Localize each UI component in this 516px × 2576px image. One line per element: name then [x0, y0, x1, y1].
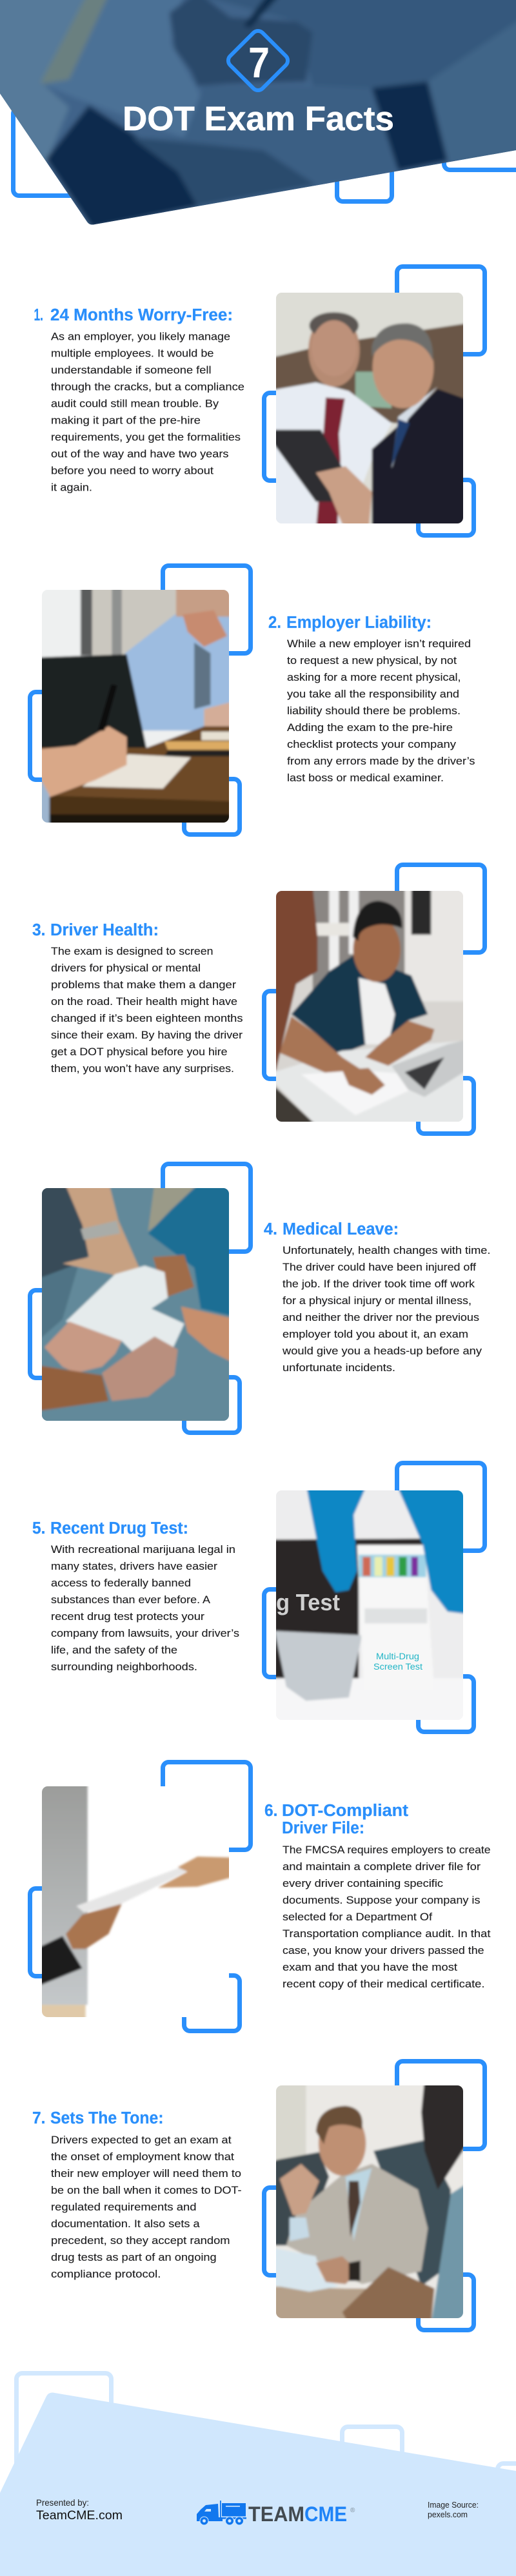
footer background shape: [0, 2393, 516, 2576]
body text: company from lawsuits, your driver’s: [51, 1627, 239, 1639]
heading: Recent Drug Test:: [50, 1519, 188, 1537]
panel: fact 6: [26, 1762, 491, 2031]
body text: The driver could have been injured off: [283, 1261, 476, 1273]
heading: DOT-Compliant: [282, 1802, 409, 1820]
body text: many states, drivers have easier: [51, 1560, 217, 1572]
brackets: [264, 2062, 485, 2330]
body text: life, and the safety of the: [51, 1644, 177, 1656]
body text: employer told you about it, an exam: [283, 1328, 468, 1340]
body text: making it part of the pre-hire: [51, 414, 201, 427]
header banner: [0, 0, 516, 224]
body text: substances than ever before. A: [51, 1594, 211, 1606]
heading: 3.: [32, 921, 45, 939]
body text: get a DOT physical before you hire: [51, 1046, 227, 1058]
heading: 5.: [32, 1519, 45, 1537]
body text: asking for a more recent physical,: [287, 671, 461, 683]
body text: unfortunate incidents.: [283, 1361, 395, 1374]
body text: [283, 1844, 491, 1990]
body text: exam and that you have the most: [283, 1961, 457, 1973]
heading: 1.: [34, 306, 43, 324]
body text: them, you won’t have any surprises.: [51, 1062, 234, 1075]
body text: for a physical injury or mental illness,: [283, 1294, 471, 1307]
presented by: TeamCME.com: [36, 2509, 123, 2522]
body text: documents. Suppose your company is: [283, 1894, 480, 1906]
body text: access to federally banned: [51, 1577, 191, 1589]
icon: truck: [197, 2501, 246, 2525]
body text: [51, 1543, 239, 1673]
body text: and maintain a complete driver file for: [283, 1860, 481, 1873]
heading: Driver File:: [282, 1819, 364, 1837]
body text: recent drug test protects your: [51, 1610, 204, 1623]
body text: documentation. It also sets a: [51, 2218, 200, 2230]
heading: 2.: [268, 614, 281, 632]
body text: every driver containing specific: [283, 1877, 444, 1889]
body text: Transportation compliance audit. In that: [283, 1927, 491, 1940]
header accent brackets: [13, 83, 516, 201]
body text: through the cracks, but a compliance: [51, 380, 244, 393]
panel: fact 3: [32, 865, 485, 1133]
body text: the job. If the driver took time off work: [283, 1278, 475, 1290]
card label: Screen Test: [373, 1662, 422, 1672]
heading: Driver Health:: [50, 921, 159, 939]
body text: case, you know your drivers passed the: [283, 1944, 484, 1956]
panel: fact 7: [32, 2062, 485, 2330]
body text: audit could still mean trouble. By: [51, 397, 219, 410]
body text: be on the ball when it comes to DOT-: [51, 2184, 241, 2196]
image source: Image Source:: [428, 2500, 479, 2510]
body text: Unfortunately, health changes with time.: [283, 1244, 490, 1256]
panel: fact 5: [32, 1463, 485, 1732]
photo: man writing at laptop: [42, 590, 229, 823]
body text: would give you a heads-up before any: [282, 1345, 482, 1357]
body text: last boss or medical examiner.: [287, 772, 444, 784]
wordmark: TEAM: [248, 2503, 304, 2526]
body text: multiple employees. It would be: [51, 347, 214, 360]
body text: The FMCSA requires employers to create: [283, 1844, 490, 1856]
header photo: hand writing on clipboard: [0, 0, 516, 224]
body text: the onset of employment know that: [51, 2151, 234, 2163]
heading: [264, 1802, 409, 1837]
body text: While a new employer isn’t required: [287, 638, 471, 650]
number badge diamond: [226, 28, 290, 93]
registered mark: ®: [350, 2507, 355, 2514]
photo: drug test kit: [276, 1490, 463, 1720]
number 7: 7: [248, 39, 270, 87]
body text: problems that make them a danger: [51, 979, 236, 991]
body text: Adding the exam to the pre-hire: [287, 721, 453, 734]
brackets: [264, 1463, 485, 1732]
image source: [428, 2500, 479, 2519]
presented by: Presented by:: [36, 2497, 89, 2508]
logo: [197, 2501, 355, 2526]
footer accent brackets: [17, 2374, 516, 2523]
body text: from any errors made by the driver’s: [287, 755, 475, 767]
title: DOT Exam Facts: [123, 100, 394, 138]
brackets: [264, 865, 485, 1133]
brackets: [30, 1164, 250, 1432]
photo: handing over document: [42, 1786, 229, 2017]
package label: g Test: [276, 1589, 340, 1615]
body text: compliance protocol.: [51, 2268, 161, 2280]
body text: drivers for physical or mental: [51, 962, 201, 974]
body text: changed if it’s been eighteen months: [51, 1012, 243, 1024]
wordmark: [248, 2503, 347, 2526]
photo: bandaged hand: [42, 1188, 229, 1421]
body text: [287, 638, 475, 784]
brackets: [30, 1762, 250, 2031]
photo: driver writing at laptop: [276, 891, 463, 1122]
heading: Medical Leave:: [283, 1220, 399, 1238]
body text: and neither the driver nor the previous: [283, 1311, 479, 1323]
panel: fact 1: [34, 267, 485, 535]
body text: it again.: [51, 481, 92, 494]
body text: on the road. Their health might have: [51, 995, 237, 1008]
body text: understandable if someone fell: [51, 364, 212, 376]
body text: [282, 1244, 490, 1374]
body text: precedent, so they accept random: [51, 2234, 230, 2247]
brackets: [264, 267, 485, 535]
photo: two businessmen: [276, 293, 463, 523]
heading: Sets The Tone:: [50, 2109, 164, 2127]
body text: [51, 945, 243, 1075]
heading: 6.: [264, 1802, 277, 1820]
body text: checklist protects your company: [287, 738, 457, 750]
body text: their new employer will need them to: [51, 2167, 241, 2180]
body text: to request a new physical, by not: [287, 654, 457, 667]
wordmark: CME: [304, 2503, 347, 2526]
body text: Drivers expected to get an exam at: [51, 2134, 232, 2146]
body text: [51, 2134, 241, 2280]
photo: meeting: [276, 2085, 463, 2318]
body text: you take all the responsibility and: [287, 688, 459, 700]
heading: Employer Liability:: [286, 614, 432, 632]
body text: selected for a Department Of: [283, 1911, 432, 1923]
brackets: [30, 566, 250, 834]
body text: regulated requirements and: [51, 2201, 196, 2213]
body text: requirements, you get the formalities: [51, 431, 241, 444]
heading: 4.: [264, 1220, 277, 1238]
heading: 7.: [32, 2109, 45, 2127]
body text: drug tests as part of an ongoing: [51, 2251, 217, 2263]
body text: out of the way and have two years: [51, 447, 228, 460]
body text: [51, 330, 244, 494]
footer: [0, 2374, 516, 2576]
heading: 24 Months Worry-Free:: [50, 306, 233, 324]
body text: liability should there be problems.: [287, 705, 461, 717]
presented by: [36, 2497, 123, 2522]
body text: before you need to worry about: [51, 464, 213, 477]
body text: recent copy of their medical certificate.: [283, 1978, 485, 1990]
body text: surrounding neighborhoods.: [51, 1661, 197, 1673]
panel: fact 4: [30, 1164, 490, 1432]
card label: [374, 1653, 422, 1670]
image source: pexels.com: [428, 2510, 468, 2519]
panel: fact 2: [30, 566, 475, 834]
body text: since their exam. By having the driver: [51, 1029, 243, 1041]
body text: The exam is designed to screen: [51, 945, 213, 957]
card label: Multi-Drug: [376, 1652, 419, 1661]
body text: As an employer, you likely manage: [51, 330, 230, 343]
body text: With recreational marijuana legal in: [51, 1543, 235, 1556]
